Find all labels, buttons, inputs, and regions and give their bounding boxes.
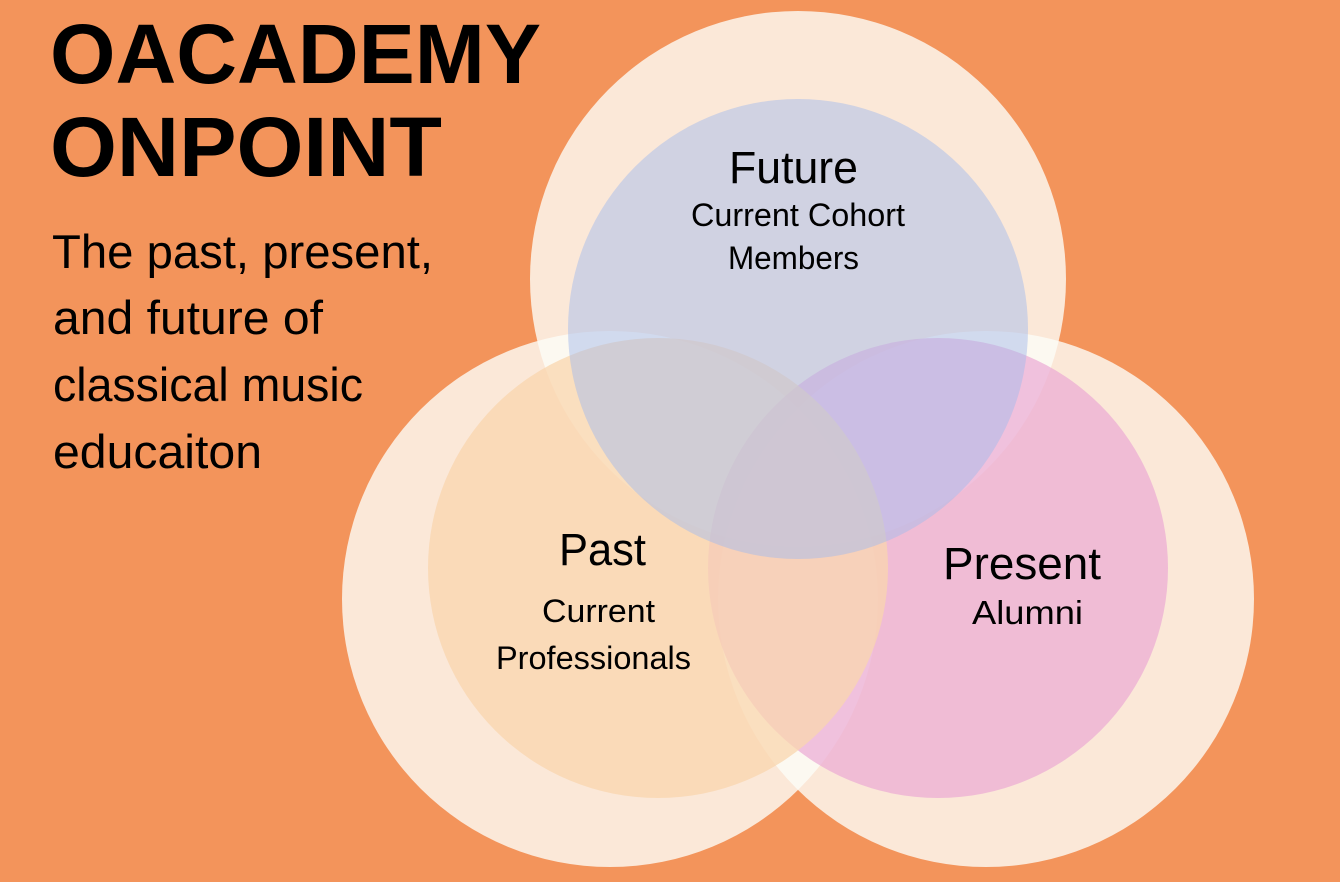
outer circle: past — [342, 331, 878, 867]
label: past — [496, 524, 691, 676]
label: present: Alumni — [972, 594, 1083, 631]
outer circle: future — [530, 11, 1066, 547]
subtitle: The past, present, — [52, 225, 433, 278]
venn diagram circles — [342, 11, 1254, 867]
title: OACADEMY — [50, 7, 541, 101]
label: past: Current — [542, 593, 655, 629]
title: ONPOINT — [50, 100, 442, 194]
label: future: Future — [729, 142, 858, 193]
subtitle: and future of — [53, 291, 324, 344]
label: present — [943, 538, 1101, 631]
subtitle — [52, 225, 433, 478]
subtitle: classical music — [53, 358, 363, 411]
inner circle: past — [428, 338, 888, 798]
title — [50, 7, 541, 194]
inner circle: future — [568, 99, 1028, 559]
outer circle: present — [718, 331, 1254, 867]
label: future — [691, 142, 905, 276]
subtitle: educaiton — [53, 425, 262, 478]
label: present: Present — [943, 538, 1101, 589]
label: past: Past — [559, 524, 646, 575]
label: future: Members — [728, 240, 859, 276]
label: past: Professionals — [496, 640, 691, 676]
label: future: Current Cohort — [691, 197, 905, 233]
inner circle: present — [708, 338, 1168, 798]
